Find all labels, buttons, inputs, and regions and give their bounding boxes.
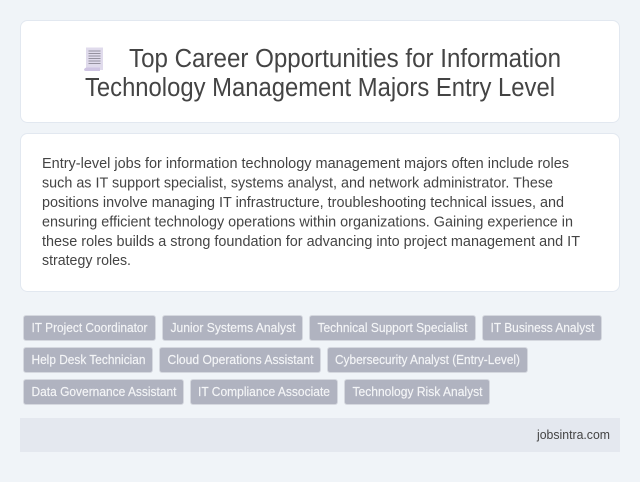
- tag: Cloud Operations Assistant: [160, 348, 320, 372]
- tag: Cybersecurity Analyst (Entry-Level): Cybersecurity Analyst (Entry-Level): [335, 353, 520, 367]
- title: Technology Management Majors Entry Level: [85, 74, 555, 102]
- text block: description: these roles builds a strong foundation for advancing into project management and IT: [42, 234, 580, 250]
- text block: description: ensuring efficient technology operations within organizations. Gaining experience in: [42, 214, 573, 230]
- text block: description: positions involve managing IT infrastructure, troubleshooting technical issues, and: [42, 195, 564, 211]
- tag: Junior Systems Analyst: Junior Systems Analyst: [170, 321, 296, 335]
- title: [85, 45, 561, 102]
- tag: IT Project Coordinator: IT Project Coordinator: [32, 321, 148, 335]
- footer text: source: jobsintra.com: [536, 428, 610, 442]
- tag: Data Governance Assistant: Data Governance Assistant: [32, 385, 177, 399]
- tag: Technical Support Specialist: Technical Support Specialist: [318, 321, 468, 335]
- tag list: job titles: [24, 316, 602, 404]
- tag: Technology Risk Analyst: [344, 380, 490, 404]
- tag: Help Desk Technician: Help Desk Technician: [32, 353, 146, 367]
- tag: Junior Systems Analyst: [162, 316, 302, 340]
- text block: description: [42, 156, 580, 269]
- text block: description: such as IT support specialist, systems analyst, and network administrator. These: [42, 176, 553, 192]
- tag: Help Desk Technician: [24, 348, 152, 372]
- panel: title card: [20, 20, 620, 122]
- text block: description: strategy roles.: [42, 253, 131, 269]
- tag: IT Business Analyst: [482, 316, 602, 340]
- tag: Cybersecurity Analyst (Entry-Level): [328, 348, 528, 372]
- panel: description card: [20, 134, 620, 292]
- tag: Data Governance Assistant: [24, 380, 184, 404]
- title: Top Career Opportunities for Information: [129, 45, 561, 73]
- tag: IT Project Coordinator: [24, 316, 156, 340]
- tag: Cloud Operations Assistant: Cloud Operations Assistant: [168, 353, 314, 367]
- tag: Technical Support Specialist: [310, 316, 476, 340]
- icon: document scroll: [84, 48, 103, 71]
- text block: description: Entry-level jobs for information technology management majors often include roles: [42, 156, 569, 172]
- footer bar: [20, 418, 620, 452]
- tag: IT Business Analyst: IT Business Analyst: [490, 321, 595, 335]
- tag: Technology Risk Analyst: Technology Risk Analyst: [352, 385, 483, 399]
- tag: IT Compliance Associate: IT Compliance Associate: [198, 385, 330, 399]
- tag: IT Compliance Associate: [190, 380, 338, 404]
